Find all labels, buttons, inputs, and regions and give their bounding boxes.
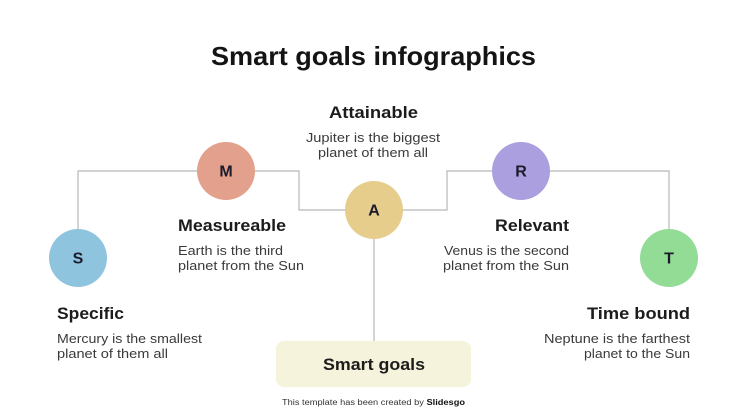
circle M: [197, 142, 255, 200]
connector lines: [78, 171, 669, 342]
circle S: [49, 229, 107, 287]
text block: Specific: Specific: [57, 304, 124, 323]
text block: Specific: Mercury is the smallest: [57, 331, 202, 346]
footer credit: This template has been created by Slidesgo: [282, 398, 465, 407]
text block: Time bound: Neptune is the farthest: [544, 331, 690, 346]
text block: Time bound: Time bound: [587, 304, 690, 323]
panel: Smart goals: Smart goals: [323, 355, 425, 374]
circle R: R: [515, 164, 527, 180]
circle T: [640, 229, 698, 287]
text block: Attainable: Jupiter is the biggest: [306, 130, 440, 145]
text block: Time bound: [544, 304, 690, 361]
circle S: S: [73, 250, 84, 268]
text block: Specific: planet of them all: [57, 346, 168, 361]
circle A: [345, 181, 403, 239]
text block: Relevant: Relevant: [495, 216, 569, 235]
text block: Attainable: planet of them all: [318, 145, 428, 160]
circle M: M: [219, 164, 233, 180]
circle A: A: [368, 202, 380, 220]
text block: Attainable: [306, 103, 440, 160]
circle T: T: [664, 250, 674, 268]
text block: Measureable: Earth is the third: [178, 243, 283, 258]
circle R: [492, 142, 550, 200]
text block: Relevant: planet from the Sun: [443, 258, 569, 273]
text block: Measureable: [178, 216, 304, 273]
text block: Measureable: Measureable: [178, 216, 286, 235]
title: Smart goals infographics: [211, 41, 536, 71]
text block: Specific: [57, 304, 202, 361]
text block: Measureable: planet from the Sun: [178, 258, 304, 273]
panel: Smart goals: [276, 341, 471, 387]
text block: Time bound: planet to the Sun: [584, 346, 690, 361]
text block: Relevant: [443, 216, 569, 273]
text block: Relevant: Venus is the second: [444, 243, 569, 258]
text block: Attainable: Attainable: [329, 103, 418, 122]
